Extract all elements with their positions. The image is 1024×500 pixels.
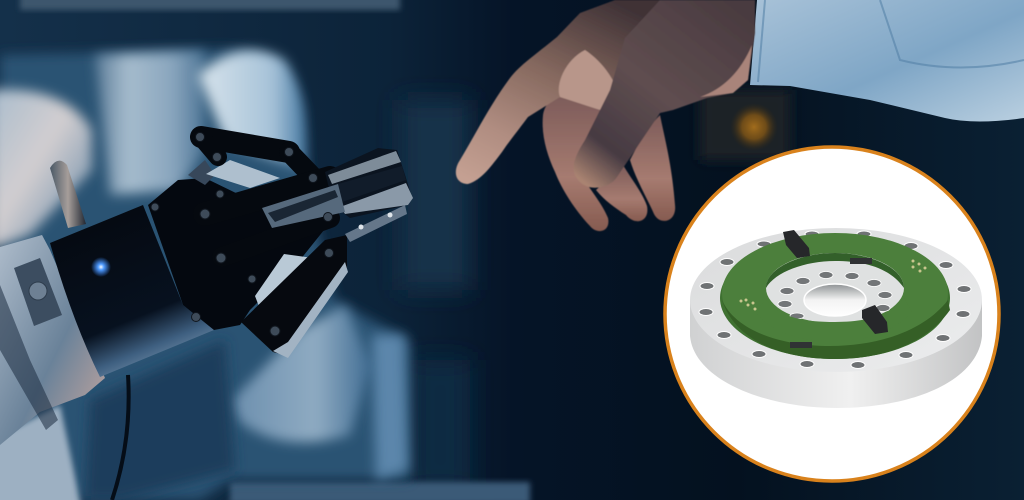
screw tab xyxy=(345,205,407,242)
wrist ring xyxy=(0,235,105,445)
jaws xyxy=(325,148,412,218)
green PCB ring xyxy=(720,233,950,359)
center opening xyxy=(766,253,904,323)
inset circle: encoder product xyxy=(665,147,999,481)
black cylinder xyxy=(50,205,214,377)
white base plate xyxy=(690,228,982,408)
human hand xyxy=(456,0,755,231)
pads xyxy=(740,260,926,310)
robot gripper xyxy=(0,132,413,445)
pinky finger xyxy=(630,115,675,221)
circle badge xyxy=(665,147,999,481)
chrome slider xyxy=(262,184,345,228)
shirt sleeve xyxy=(750,0,1024,122)
cable xyxy=(112,375,129,500)
connectors xyxy=(783,230,888,348)
hub xyxy=(148,175,340,330)
bore xyxy=(804,284,866,316)
lower finger xyxy=(241,235,347,356)
middle finger xyxy=(543,96,608,231)
thumb and wrist xyxy=(574,0,755,188)
pin xyxy=(50,161,86,228)
front PCB lip xyxy=(755,298,912,341)
palm crease area xyxy=(559,50,618,110)
lower finger window xyxy=(255,254,313,309)
ring finger xyxy=(596,165,647,221)
blurred robot arm background xyxy=(0,49,410,500)
screws xyxy=(151,132,334,336)
grey link behind xyxy=(188,160,215,185)
upper link xyxy=(201,137,314,178)
index finger and hand back xyxy=(456,0,680,184)
window upper xyxy=(206,160,280,188)
middle link xyxy=(205,178,330,257)
